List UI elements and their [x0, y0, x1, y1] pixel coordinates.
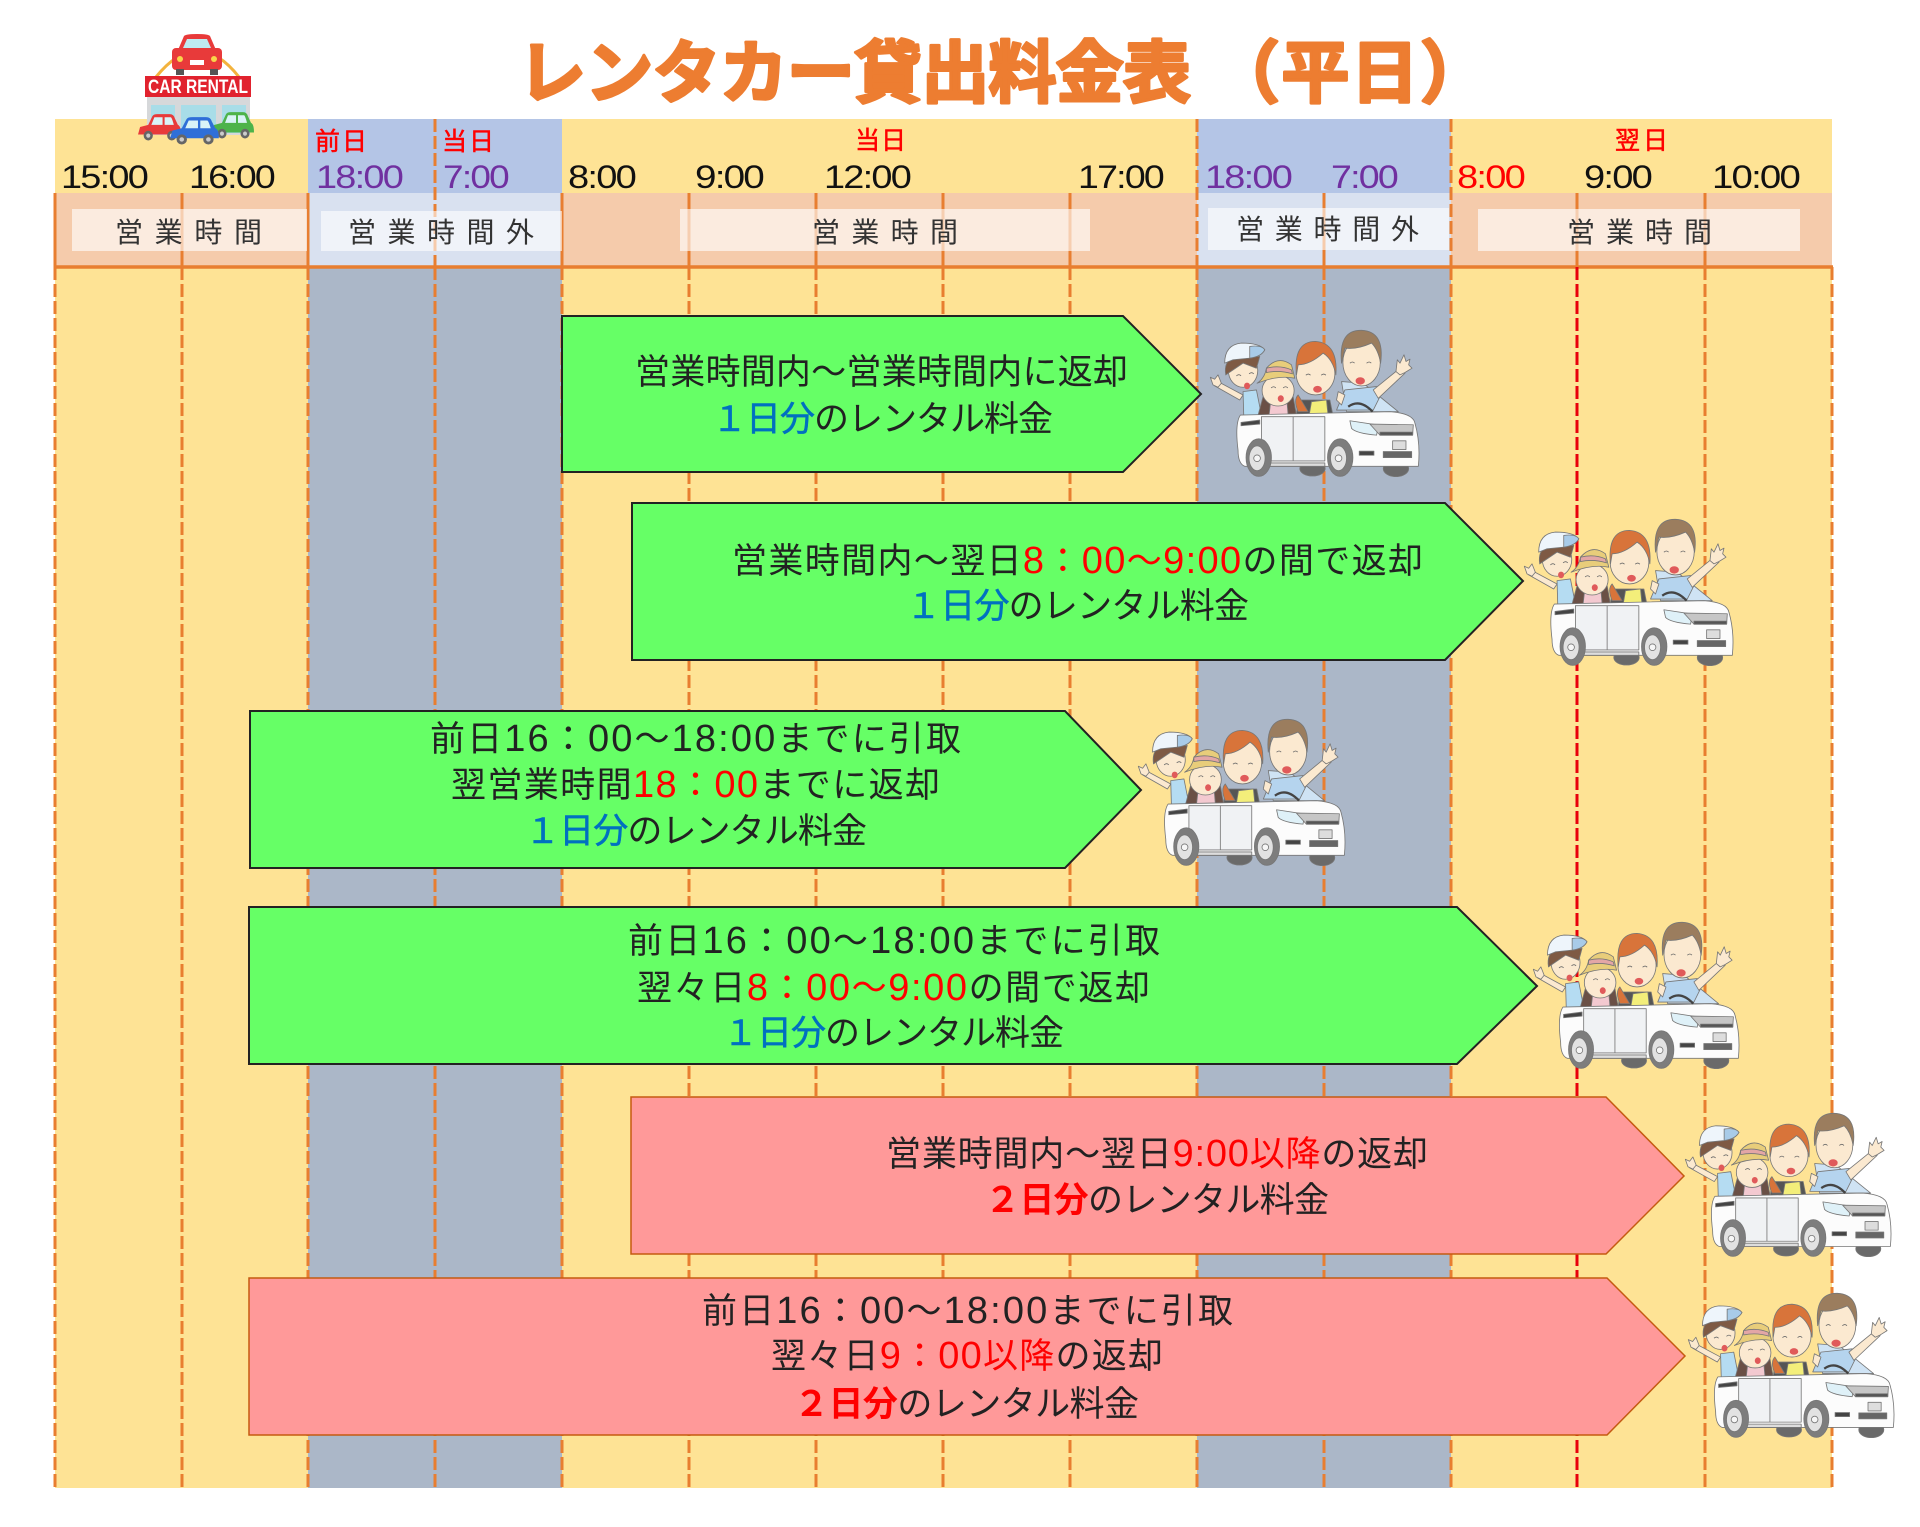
arrow 4: 1 day: 前日16：00～18:00までに引取 [628, 913, 1160, 964]
header: time labels: 8:00 [568, 159, 636, 195]
arrow 3: 1 day: 翌営業時間18：00までに返却 [451, 757, 940, 808]
header: time labels: 10:00 [1712, 159, 1800, 195]
arrow 6: 2 days: 前日16：00～18:00までに引取 [702, 1283, 1233, 1334]
header: time labels: 8:00 [1457, 159, 1525, 195]
label: business hours 1 [72, 209, 307, 251]
family car 1 [1210, 330, 1419, 477]
icon: red car on roof [172, 34, 222, 75]
title: レンタカー貸出料金表 [518, 18, 1191, 117]
arrow 6: 2 days: ２日分のレンタル料金 [794, 1376, 1139, 1427]
icon: car rental shop [138, 34, 254, 144]
arrow 5: 2 days [631, 1097, 1684, 1254]
arrow 4: 1 day: 翌々日8：00～9:00の間で返却 [637, 960, 1150, 1011]
cars in front of shop [138, 112, 254, 144]
header: day labels [315, 121, 1668, 158]
label: business hours 2: 営業時間 [812, 211, 958, 251]
label: outside business hours 2: 営業時間外 [1236, 208, 1419, 248]
arrow 1: 1 day: １日分のレンタル料金 [712, 391, 1053, 442]
arrow 4: 1 day: １日分のレンタル料金 [723, 1005, 1064, 1056]
arrow 2: 1 day [632, 503, 1523, 660]
header: time labels: 18:00 [1205, 159, 1292, 195]
header: time labels: 7:00 [1331, 159, 1398, 195]
label: business hours 3: 営業時間 [1567, 211, 1712, 251]
label: business hours 3 [1478, 209, 1800, 251]
banner: CAR RENTAL: CAR RENTAL [148, 77, 248, 98]
arrow 3: 1 day: １日分のレンタル料金 [525, 803, 867, 854]
header: time labels [61, 159, 1800, 195]
family car 2 [1524, 519, 1733, 666]
header: day labels: 前日 [315, 122, 367, 158]
header: time labels: 18:00 [316, 159, 403, 195]
header: day labels: 当日 [855, 121, 906, 157]
header: time labels: 7:00 [443, 159, 509, 195]
header: time labels: 16:00 [189, 159, 275, 195]
header: time labels: 9:00 [1584, 159, 1652, 195]
label: business hours 1: 営業時間 [115, 211, 262, 251]
header: status labels row [72, 208, 1800, 251]
title: （平日） [1212, 18, 1488, 117]
family car 3 [1138, 719, 1345, 866]
arrow 1: 1 day [562, 316, 1201, 472]
arrow 5: 2 days: 営業時間内～翌日9:00以降の返却 [886, 1126, 1428, 1177]
header: time labels: 12:00 [824, 159, 911, 195]
label: business hours 2 [680, 209, 1090, 251]
header: day labels: 翌日 [1615, 121, 1668, 157]
arrow 5: 2 days: ２日分のレンタル料金 [985, 1172, 1329, 1223]
arrow 3: 1 day [250, 711, 1141, 868]
family car 5 [1685, 1113, 1891, 1257]
arrow 2: 1 day: 営業時間内～翌日8：00～9:00の間で返却 [732, 533, 1423, 584]
header: time labels: 17:00 [1078, 159, 1164, 195]
arrow 3: 1 day: 前日16：00～18:00までに引取 [430, 711, 961, 762]
header: time labels: 9:00 [695, 159, 764, 195]
arrow 6: 2 days [249, 1278, 1685, 1435]
label: outside business hours 1: 営業時間外 [348, 211, 534, 251]
building [147, 97, 250, 135]
arrow 2: 1 day: １日分のレンタル料金 [906, 578, 1249, 629]
header: time labels: 15:00 [61, 159, 148, 195]
family car 4 [1533, 922, 1739, 1069]
title [518, 18, 1488, 117]
header: day labels: 当日 [442, 122, 494, 158]
arrow 6: 2 days: 翌々日9：00以降の返却 [771, 1328, 1163, 1379]
arrow 1: 1 day: 営業時間内～営業時間内に返却 [635, 344, 1128, 395]
arrow 4: 1 day [249, 907, 1537, 1064]
family car 6 [1688, 1293, 1894, 1438]
